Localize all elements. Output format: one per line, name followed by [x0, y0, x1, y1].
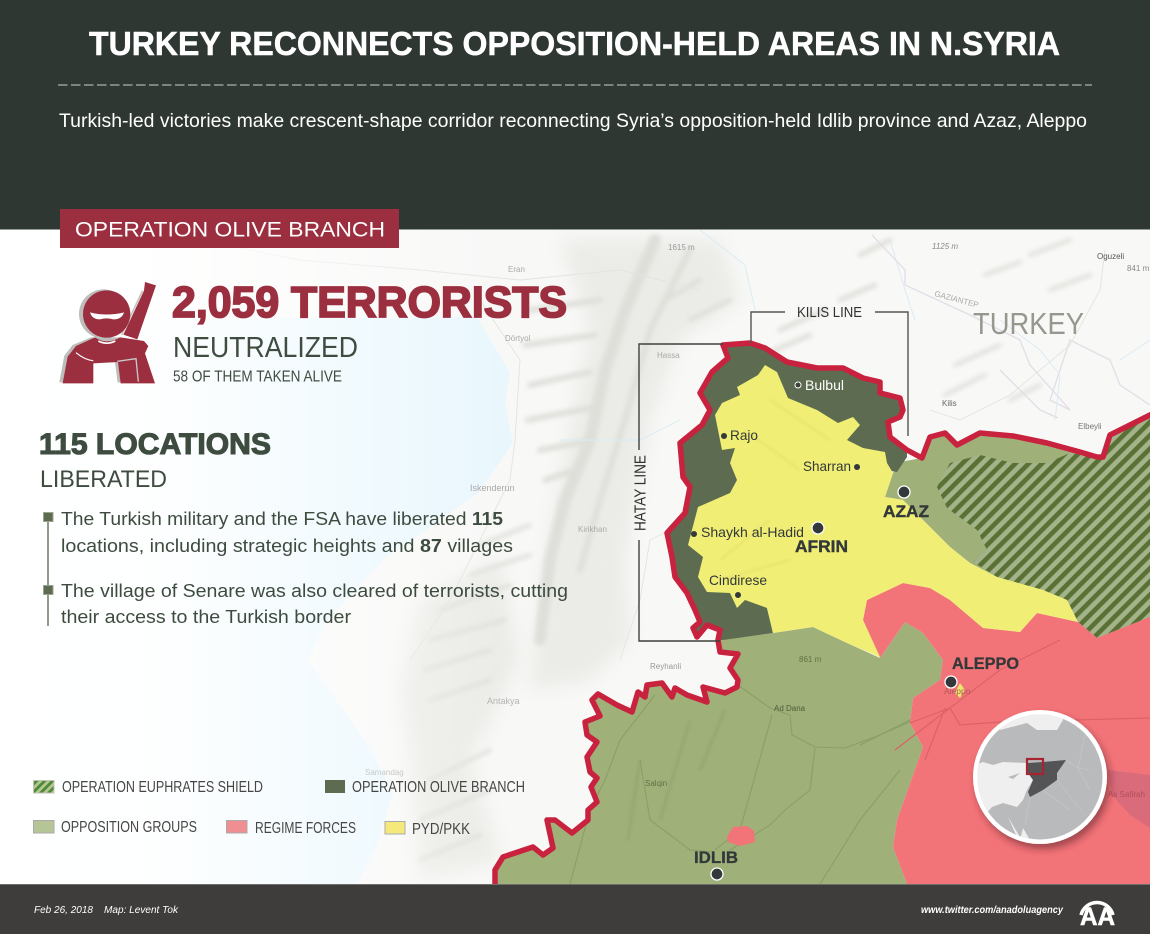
inset locator map [970, 705, 1110, 850]
Hatay line bracket [632, 344, 723, 641]
icon: masked terrorist with weapon [59, 282, 156, 383]
soft terrain base [400, 240, 740, 880]
small map labels: Iskenderun [470, 483, 515, 493]
stat: terrorists neutralized: 58 OF THEM TAKEN ALIVE [173, 368, 342, 386]
city: Azaz: AZAZ [883, 502, 929, 521]
section banner: Operation Olive Branch: OPERATION OLIVE BRANCH [75, 218, 385, 242]
stat: locations liberated: 115 LOCATIONS [39, 428, 271, 461]
legend item: Regime Forces [226, 820, 356, 837]
small map labels: Oguzeli [1097, 252, 1124, 261]
territory: regime forces [863, 583, 1150, 884]
map roads and rivers [872, 235, 1150, 418]
city: Idlib [694, 848, 738, 880]
city: Afrin [795, 522, 848, 556]
small map labels: As Safirah [1108, 790, 1145, 799]
stat: terrorists neutralized: NEUTRALIZED [173, 332, 358, 364]
bullet list: their access to the Turkish border [61, 606, 351, 627]
country label: Turkey: TURKEY [973, 306, 1084, 341]
small map labels: Kirikhan [578, 525, 607, 534]
terrain in regime area [895, 640, 1150, 760]
city: Afrin: AFRIN [795, 537, 848, 556]
city: Rajo: Rajo [730, 427, 758, 443]
legend item: Opposition Groups: OPPOSITION GROUPS [61, 819, 197, 836]
map credit: Map: Levent Tok [104, 904, 179, 916]
legend item: PYD/PKK: PYD/PKK [412, 821, 471, 838]
city: Cindirese [709, 572, 767, 598]
small map labels: Eran [508, 265, 525, 274]
bullet list: The Turkish military and the FSA have liberated 115 [61, 508, 503, 529]
city: Bulbul: Bulbul [805, 377, 844, 393]
map background [240, 230, 1150, 884]
footer [0, 884, 1150, 934]
bullet list: locations, including strategic heights and 87 villages [61, 535, 513, 556]
stat: locations liberated [39, 428, 271, 493]
small map labels: GAZIANTEP [933, 289, 980, 310]
territory: Operation Euphrates Shield hatch [937, 415, 1150, 638]
bullet list [44, 508, 568, 627]
white fade over left side of map [0, 248, 400, 884]
city: Aleppo [944, 654, 1019, 696]
terrain ridges [420, 240, 1090, 860]
small map labels: Ad Dana [774, 704, 806, 713]
city: Cindirese: Cindirese [709, 572, 767, 588]
legend item: Operation Olive Branch: OPERATION OLIVE BRANCH [352, 779, 525, 796]
terrain in Afrin [720, 400, 830, 580]
small map labels: 861 m [799, 655, 822, 664]
stat: terrorists neutralized: 2,059 TERRORISTS [172, 278, 567, 327]
city: Idlib: IDLIB [694, 848, 738, 867]
small map labels: Samandag [365, 768, 404, 777]
territory: opposition groups, Azaz [885, 415, 1150, 638]
small map labels: Hassa [657, 351, 680, 360]
city: Sharran: Sharran [803, 458, 851, 474]
title: TURKEY RECONNECTS OPPOSITION-HELD AREAS IN N.SYRIA [89, 26, 1060, 63]
small map labels: Dörtyol [505, 334, 531, 343]
city: Aleppo: Aleppo [944, 686, 971, 696]
Regime pocket near Idlib [727, 826, 755, 846]
twitter address: www.twitter.com/anadoluagency [921, 904, 1064, 916]
sea: Gulf of Alexandretta [336, 317, 513, 884]
PYD/PKK patch in Aleppo [955, 683, 965, 698]
Kilis line bracket: KILIS LINE [797, 305, 862, 321]
territory: PYD/PKK [688, 365, 1078, 657]
small map labels: 841 m [1127, 264, 1150, 273]
legend item: PYD/PKK [385, 821, 471, 838]
legend item: Regime Forces: REGIME FORCES [255, 820, 356, 837]
small map labels: Salqin [645, 779, 667, 788]
small map labels: 1615 m [668, 243, 695, 252]
city: Aleppo: ALEPPO [952, 654, 1019, 673]
darker patch near As Safirah [1108, 770, 1150, 828]
small map labels: Elbeyli [1078, 422, 1102, 431]
Turkish border line [495, 343, 1150, 886]
legend item: Operation Euphrates Shield: OPERATION EUPHRATES SHIELD [62, 779, 263, 796]
section banner: Operation Olive Branch [60, 209, 399, 248]
territory: Operation Olive Branch [667, 343, 907, 640]
subtitle: Turkish-led victories make crescent-shape corridor reconnecting Syria’s opposition-held Idlib province and Azaz, Aleppo [59, 110, 1087, 132]
Hatay line bracket: HATAY LINE [632, 455, 650, 531]
small map labels: Reyhanli [650, 662, 681, 671]
footer credits: Feb 26, 2018 [34, 904, 93, 916]
small map labels [365, 242, 1150, 799]
terrain in Idlib [570, 685, 920, 884]
small map labels: 1125 m [932, 242, 958, 251]
small map labels: Kilis [942, 399, 957, 408]
stat: terrorists neutralized [172, 278, 567, 386]
header band [0, 0, 1150, 230]
legend [34, 779, 525, 838]
city: Azaz [883, 486, 929, 521]
stat: locations liberated: LIBERATED [40, 466, 167, 493]
bullet list: The village of Senare was also cleared of terrorists, cutting [61, 580, 568, 601]
legend item: Opposition Groups [34, 819, 197, 836]
small map labels: Antakya [487, 696, 520, 706]
territory: opposition groups, Idlib [495, 622, 943, 884]
icon: Anadolu Agency logo: AA [1080, 903, 1115, 931]
Kilis line bracket [751, 305, 908, 436]
city: Shaykh al-Hadid: Shaykh al-Hadid [701, 524, 804, 540]
